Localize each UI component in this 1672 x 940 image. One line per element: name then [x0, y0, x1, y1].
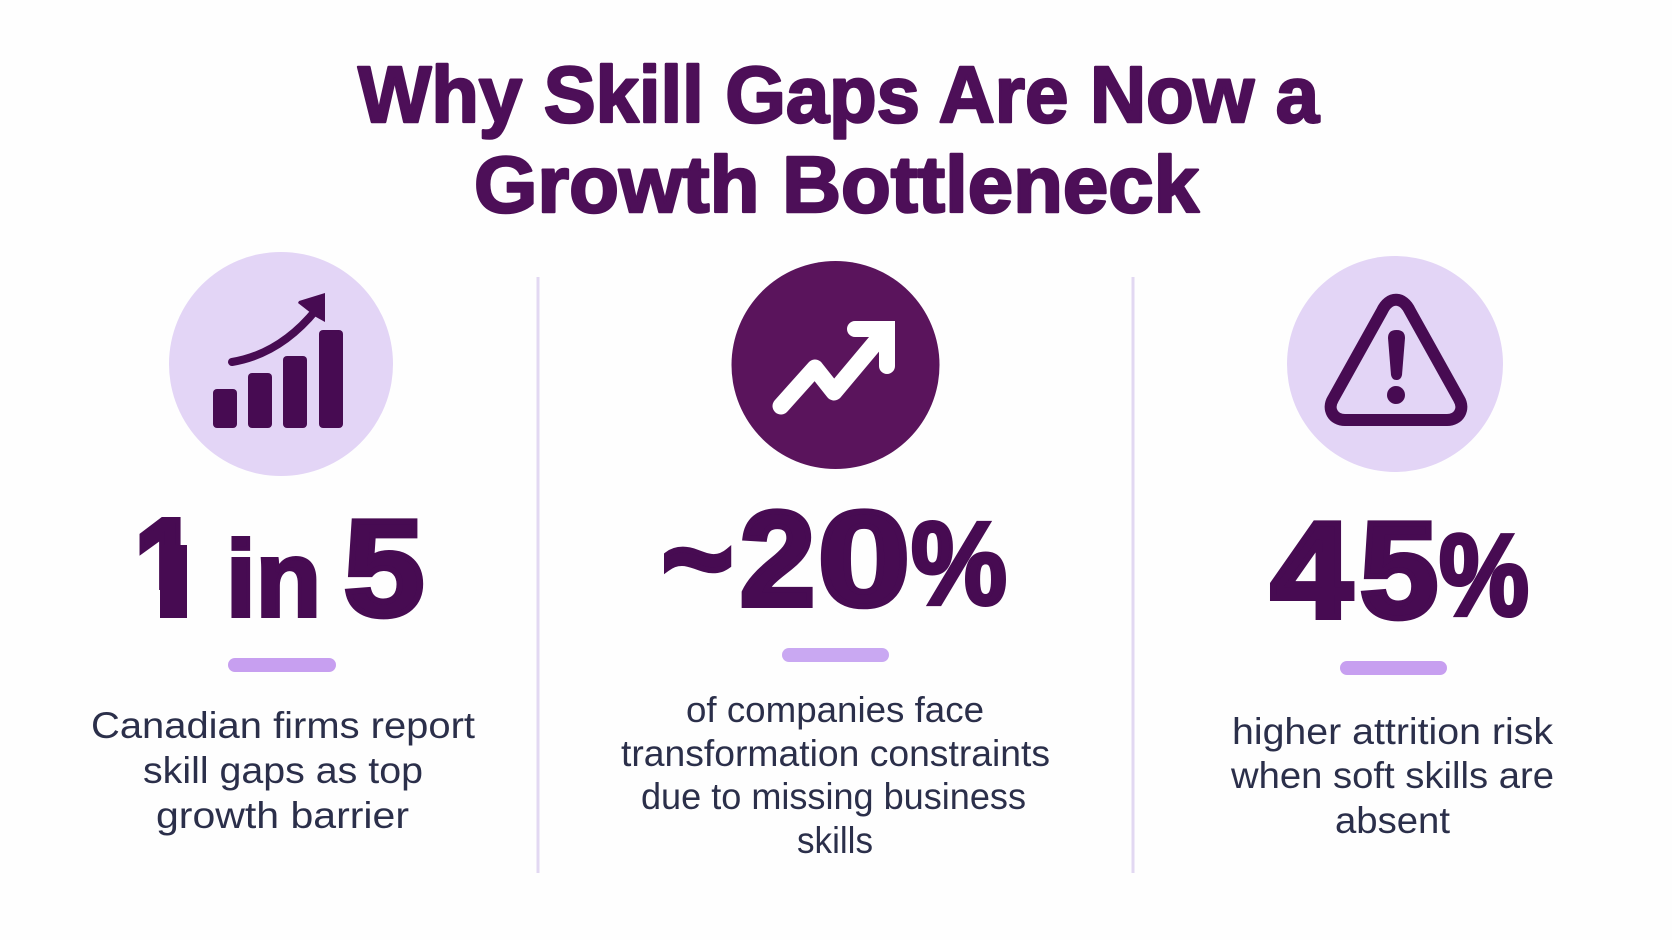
statistic: 1 in 5: 1	[134, 491, 200, 645]
panel: 1 in 5	[91, 252, 476, 836]
statistic: ~20%: %	[911, 498, 1007, 630]
statistic: 45%: 5	[1360, 494, 1438, 646]
description	[1230, 711, 1554, 841]
description: skills	[797, 820, 873, 861]
statistic: 45%	[1271, 494, 1529, 646]
title	[358, 50, 1319, 229]
icon: warning triangle	[1287, 256, 1503, 472]
statistic: 1 in 5: 5	[344, 492, 424, 644]
description	[91, 705, 476, 836]
icon: zigzag up arrow	[732, 261, 940, 469]
description: growth barrier	[156, 795, 409, 836]
description	[621, 689, 1050, 861]
statistic: ~20%: 2	[740, 485, 815, 634]
description: absent	[1335, 800, 1451, 841]
description: due to missing business	[641, 776, 1026, 817]
panel: 45%	[1230, 256, 1554, 841]
statistic: 45%: %	[1439, 510, 1529, 640]
accent bar	[1340, 661, 1447, 675]
description: of companies face	[686, 689, 984, 730]
title: Growth Bottleneck	[474, 140, 1200, 229]
accent bar	[782, 648, 889, 662]
statistic: 1 in 5: in	[226, 518, 321, 639]
statistic: 45%: 4	[1271, 494, 1352, 646]
icon: rising bar chart	[169, 252, 393, 476]
description: when soft skills are	[1230, 755, 1554, 796]
statistic: ~20%: ~	[662, 485, 733, 631]
statistic: ~20%: 0	[818, 485, 910, 634]
statistic: 1 in 5	[125, 491, 424, 645]
accent bar	[228, 658, 336, 672]
title: Why Skill Gaps Are Now a	[358, 50, 1319, 139]
description: higher attrition risk	[1232, 711, 1554, 752]
panel: ~20%	[621, 261, 1050, 861]
description: Canadian firms report	[91, 705, 476, 746]
description: transformation constraints	[621, 733, 1050, 774]
description: skill gaps as top	[143, 750, 423, 791]
statistic: ~20%	[662, 485, 1007, 634]
